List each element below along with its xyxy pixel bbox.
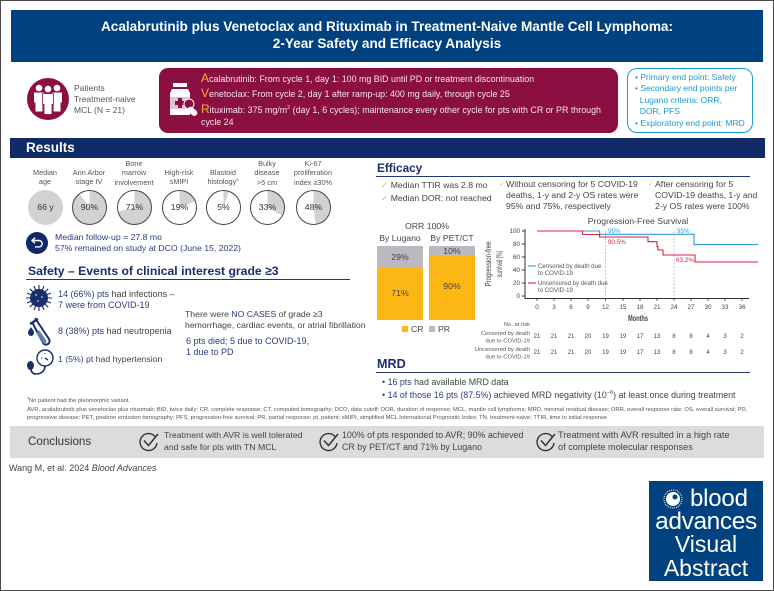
stat: bone marrow [115,159,154,225]
stat: bulky disease [250,159,285,225]
line chart: progression-free survival: 18 [636,304,644,311]
panel: baseline characteristics: 19% [171,202,188,212]
MRD bullet one: • 16 pts had available MRD data [382,377,509,387]
citation: Wang M, et al. 2024 Blood Advances [9,463,156,473]
stat: median age [28,168,63,225]
number at risk table: 19 [602,334,609,340]
end point list: • Exploratory end point: MRD [635,118,745,128]
conclusion three [558,429,730,453]
number at risk table: 4 [706,334,710,340]
conclusion one [164,429,303,453]
conclusion one: Treatment with AVR is well tolerated [164,430,303,440]
bullet: after censoring: 2-y OS rates were 100% [655,201,750,211]
panel: baseline characteristics: Ann Arbor [73,168,105,177]
stat: sMIPI [162,168,197,225]
line chart: progression-free survival: Months [628,314,648,323]
MRD bullet two: • 14 of those 16 pts (87.5%) achieved MRD negativity (10−6) at least once during treatment [382,390,736,400]
panel: baseline characteristics: Ki-67 [304,159,322,168]
panel: baseline characteristics: High-risk [165,168,193,177]
panel: baseline characteristics: stage IV [76,177,102,186]
conclusion two: CR by PET/CT and 71% by Lugano [342,442,482,452]
PET/CT bar: 90% [443,281,461,291]
conclusion three: of complete molecular responses [558,442,693,452]
panel: treatment regimen [159,68,618,133]
number at risk table: 21 [551,334,558,340]
bar chart: overall response rate [377,221,475,334]
panel: baseline characteristics: proliferation [294,168,332,177]
chart heading: ORR 100% [405,221,449,231]
number at risk table: 13 [654,350,661,356]
neutropenia text: 8 (38%) pts had neutropenia [58,326,172,336]
patients text [74,83,136,115]
no cases text: hemorrhage, cardiac events, or atrial fibrillation [185,320,366,330]
legend: PR [438,324,450,334]
hypertension text: 1 (5%) pt had hypertension [58,354,162,364]
line chart: progression-free survival: 20 [513,280,520,287]
no cases text [185,309,366,330]
icon: medicine bottle and pills [170,83,198,116]
line chart: progression-free survival: 0 [516,293,520,300]
line chart: progression-free survival: 30 [704,304,712,311]
panel: patients [27,78,136,120]
infections text [58,289,175,310]
deaths text [186,336,309,357]
number at risk table: 21 [568,334,575,340]
stat: Ki-67 [294,159,332,225]
panel: baseline characteristics: 48% [305,202,322,212]
line chart: progression-free survival: 12 [602,304,609,311]
bullet: without censoring: deaths, 1-y and 2-y OS rates were [506,190,638,200]
panel: baseline characteristics: histologya [207,177,239,186]
line chart: progression-free survival: 33 [721,304,729,311]
line chart: progression-free survival: 95% [608,228,621,235]
panel: baseline characteristics: disease [254,168,280,177]
bullet: after censoring: COVID-19 deaths, 1-y and [655,190,757,200]
logo: Blood Advances Visual Abstract: advances [655,508,757,535]
panel: baseline characteristics: marrow [122,168,146,177]
results heading bar [10,138,765,158]
panel: baseline characteristics: Bulky [258,159,276,168]
number at risk table: 19 [620,334,627,340]
icon: check two [318,431,340,453]
panel: efficacy bullets [381,179,757,211]
follow-up block [26,232,241,254]
line chart: progression-free survival: 27 [687,304,695,311]
line chart: progression-free survival: 36 [738,304,746,311]
number at risk table: 19 [620,350,627,356]
icon: patient group [27,78,69,120]
Lugano label: By Lugano [379,233,421,243]
conclusion two: 100% of pts responded to AVR; 90% achieved [342,430,523,440]
footnotes [27,396,757,423]
number at risk table: 3 [723,350,727,356]
icon: check one [138,431,160,453]
line chart: progression-free survival: Censored by death due [538,263,602,270]
Lugano bar: 29% [391,252,409,262]
title banner: Acalabrutinib plus Venetoclax and Rituximab in Treatment-Naive Mantle Cell Lymphoma: [101,19,673,34]
conclusions heading: Conclusions [28,435,91,448]
follow-up text: 57% remained on study at DCO (June 15, 2022) [55,243,241,253]
rituximab lines: Rituximab: 375 mg/m2 (day 1, 6 cycles); maintenance every other cycle for pts with CR or PR through [201,102,601,116]
panel: conclusions [10,426,764,458]
PET/CT bar [429,246,475,320]
abbreviations: AVR, acalabrutinib plus venetoclax plus rituximab; BID, twice daily; CR, complete response; CT, computed tomography; DCO, data cutoff; DOR, duration of response; MCL, mantle cell lymphoma; MRD, minimal residual disease; ORR, overall response rate; OS, overall survival; PD, [27,407,747,413]
number at risk table: Uncensored by death [475,347,530,353]
line chart: progression-free survival: 100 [509,228,520,235]
line chart: progression-free survival: 63.2% [676,257,694,264]
icon: logo cell [663,489,683,509]
efficacy heading: Efficacy [377,161,422,175]
results heading bar: Results [26,140,75,155]
number at risk table: due to COVID-19 [486,338,530,344]
number at risk table: 13 [654,334,661,340]
line chart: progression-free survival: 90.5% [608,239,626,246]
number at risk table: No. at risk [504,322,530,328]
icon: follow-up arrow [26,232,48,254]
number at risk table: 8 [672,334,676,340]
icon: check three [535,431,557,453]
panel: baseline characteristics: involvement [115,178,153,187]
patients text: MCL (N = 21) [74,105,125,115]
panel: baseline characteristics: 33% [259,202,276,212]
no cases text: There were NO CASES of grade ≥3 [185,309,323,319]
panel: baseline characteristics: Blastoid [210,168,236,177]
panel: baseline characteristics: 90% [81,202,98,212]
panel: safety events [26,285,366,375]
legend: CR [411,324,424,334]
Lugano bar [377,246,423,320]
bullet: TTIR and DOR: ✓ Median TTIR was 2.8 mo [381,180,488,190]
line chart: progression-free survival: 3 [552,304,556,311]
Lugano bar: 71% [391,288,409,298]
number at risk table: 21 [568,350,575,356]
conclusion two [342,429,523,453]
follow-up text [55,232,241,253]
number at risk table: 17 [637,350,644,356]
stat: median age: Median [33,168,57,177]
number at risk table: 19 [602,350,609,356]
line chart: progression-free survival: Uncensored by death due [538,280,608,287]
line chart: progression-free survival: 80 [513,241,520,248]
line chart: progression-free survival: Progression-free [484,241,493,286]
end point list: Lugano criteria: ORR, [640,95,722,105]
number at risk table: 21 [534,334,541,340]
line chart: progression-free survival: to COVID-19 [538,270,573,277]
line chart: progression-free survival: 60 [513,254,520,261]
number at risk table: 2 [740,350,744,356]
number at risk table: 21 [534,350,541,356]
rituximab lines [201,102,601,127]
stat: median age: age [39,177,51,186]
logo: Blood Advances Visual Abstract: Abstract [664,555,748,581]
line chart: progression-free survival: to COVID-19 [538,287,573,294]
panel: baseline characteristics: sMIPI [170,177,188,186]
number at risk table: 8 [689,334,693,340]
number at risk table [475,322,744,360]
conclusion one: and safe for pts with TN MCL [164,442,276,452]
patients text: Treatment-naive [74,94,136,104]
conclusion three: Treatment with AVR resulted in a high rate [558,430,730,440]
abbreviations [27,407,747,422]
infections text: 7 were from COVID-19 [58,300,150,310]
bullet: after censoring [648,179,757,211]
logo: Blood Advances Visual Abstract: Visual [675,531,737,557]
number at risk table: Censored by death [481,331,530,337]
infections text: 14 (66%) pts had infections – [58,289,175,299]
panel: MRD bullets [382,377,736,400]
panel: baseline characteristics: 71% [126,202,143,212]
line chart: progression-free survival: Progression-Free Survival [588,216,688,226]
rituximab lines: cycle 24 [201,117,234,127]
stat: blastoid [206,168,241,225]
number at risk table: due to COVID-19 [486,354,530,360]
title banner: 2-Year Safety and Efficacy Analysis [273,36,501,50]
panel: baseline characteristics: Bone [125,159,143,168]
bullet: TTIR and DOR: ✓ Median DOR: not reached [381,193,492,203]
icon: virus [26,285,52,311]
PET/CT label: By PET/CT [430,233,474,243]
line chart: progression-free survival: 24 [670,304,678,311]
logo text: blood [690,485,748,512]
number at risk table: 8 [689,350,693,356]
patients text: Patients [74,83,105,93]
panel: baseline characteristics: 5% [217,202,230,212]
stat: stage IV [72,168,107,225]
bullet: without censoring [499,179,638,211]
line chart: progression-free survival: 21 [653,304,661,311]
end point list [635,72,745,128]
safety heading: Safety – Events of clinical interest grade ≥3 [28,264,279,278]
bullet: without censoring: Without censoring for 5 COVID-19 [506,179,638,189]
panel: end points [627,68,753,133]
bullet: after censoring: ✓ [648,181,654,188]
bullet: after censoring: After censoring for 5 [655,179,733,189]
number at risk table: 20 [585,350,592,356]
bullet: TTIR and DOR [381,180,492,203]
icon: stethoscope gauge [27,349,54,375]
panel: baseline characteristics: index ≥30% [294,178,332,187]
panel: baseline characteristics: >5 cm [257,178,277,187]
line chart: progression-free survival: 40 [513,267,520,274]
legend [402,324,450,334]
bullet: without censoring: 95% and 75%, respectively [506,201,611,211]
venetoclax line: Venetoclax: From cycle 2, day 1 after ramp-up: 400 mg daily, through cycle 25 [201,86,510,100]
number at risk table: 4 [706,350,710,356]
number at risk table: 17 [637,334,644,340]
PET/CT bar: 10% [443,246,461,256]
end point list: • Secondary end points per [635,83,737,93]
title banner [11,10,763,62]
bullet: without censoring: ✓ [499,181,505,188]
line chart: progression-free survival: 0 [535,304,539,311]
panel: baseline characteristics [28,159,332,225]
abbreviations: progressive disease; PET, positron emission tomography; PFS, progression-free survival; PR, partial response; pt, patient; sMIPI, simplified MCL International Prognostic Index; TN, treatment-naive; TTIR, time to initial response [27,414,607,420]
stat: median age: 66 y [37,202,54,212]
logo: Blood Advances Visual Abstract [649,481,763,581]
number at risk table: 20 [585,334,592,340]
deaths text: 6 pts died; 5 due to COVID-19, [186,336,309,346]
line chart: progression-free survival: survival (%) [495,250,504,278]
line chart: progression-free survival: 15 [619,304,627,311]
follow-up text: Median follow-up = 27.8 mo [55,232,162,242]
number at risk table: 21 [551,350,558,356]
footnote a: aNo patient had the pleomorphic variant. [27,396,130,404]
number at risk table: 8 [672,350,676,356]
line chart: progression-free survival: 9 [586,304,590,311]
number at risk table: 2 [740,334,744,340]
line chart: progression-free survival: 95% [677,228,690,235]
deaths text: 1 due to PD [186,347,234,357]
MRD heading: MRD [377,357,406,371]
number at risk table: 3 [723,334,727,340]
acalabrutinib line: Acalabrutinib: From cycle 1, day 1: 100 mg BID until PD or treatment discontinuation [201,71,534,85]
end point list: DOR, PFS [640,106,680,116]
line chart: progression-free survival: 6 [569,304,573,311]
end point list: • Primary end point: Safety [635,72,736,82]
icon: test tube [28,318,50,346]
